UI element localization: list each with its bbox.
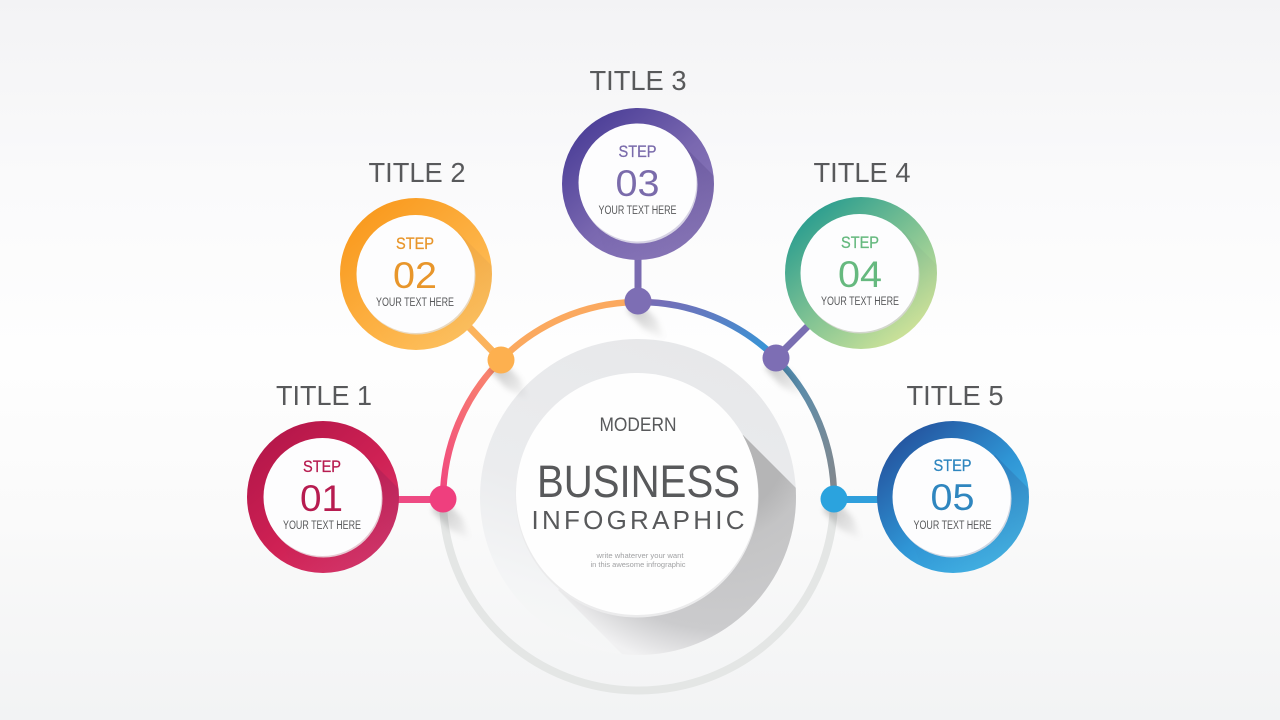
step label 3: STEP <box>618 143 656 161</box>
icon ring 5 <box>877 421 1029 573</box>
center heading: BUSINESS <box>537 456 740 507</box>
icon ring 1 <box>247 421 399 573</box>
step 2 <box>340 157 528 400</box>
step label 3: 03 <box>616 163 660 204</box>
step label 5: 05 <box>930 477 974 518</box>
center caption <box>590 551 686 569</box>
step label 1: 01 <box>300 478 343 519</box>
step label 3: YOUR TEXT HERE <box>598 205 677 217</box>
step label 2: YOUR TEXT HERE <box>376 297 454 309</box>
title 2: TITLE 2 <box>368 157 466 188</box>
connector 2 <box>468 326 528 400</box>
step label 5 <box>914 457 992 532</box>
step label 2: STEP <box>396 235 434 253</box>
title 1: TITLE 1 <box>276 380 372 411</box>
step 1 <box>247 386 465 573</box>
step label 2: 02 <box>393 255 437 296</box>
step label 4 <box>821 234 899 308</box>
step label 3 <box>598 143 677 217</box>
step label 1: STEP <box>303 458 341 476</box>
icon ring 2 <box>340 198 492 350</box>
center caption: write whaterver your want <box>595 551 684 560</box>
step 4 <box>762 163 937 392</box>
step 5 <box>820 386 1029 573</box>
title 5: TITLE 5 <box>906 380 1004 411</box>
icon ring 3 <box>562 108 714 260</box>
step label 2 <box>376 235 454 309</box>
connector 3 <box>624 256 665 340</box>
step label 5: STEP <box>934 457 972 475</box>
connector 5 <box>820 486 882 540</box>
lower grey ring <box>443 499 834 690</box>
step label 4: YOUR TEXT HERE <box>821 296 899 308</box>
step label 4: 04 <box>838 254 882 295</box>
center heading: INFOGRAPHIC <box>532 505 744 535</box>
center heading <box>532 415 744 535</box>
central disc with long shadow <box>480 339 796 654</box>
connector 1 <box>395 486 470 540</box>
step label 1 <box>283 458 361 532</box>
title 4: TITLE 4 <box>814 157 910 188</box>
step label 4: STEP <box>841 234 879 252</box>
step label 5: YOUR TEXT HERE <box>914 520 992 532</box>
connector arcs <box>443 302 834 499</box>
step label 1: YOUR TEXT HERE <box>283 520 361 532</box>
connector 4 <box>762 326 808 398</box>
center caption: in this awesome infrographic <box>590 560 686 569</box>
center heading: MODERN <box>600 415 676 436</box>
title 3: TITLE 3 <box>590 65 686 96</box>
icon ring 4 <box>785 197 937 349</box>
step 3 <box>562 70 714 334</box>
